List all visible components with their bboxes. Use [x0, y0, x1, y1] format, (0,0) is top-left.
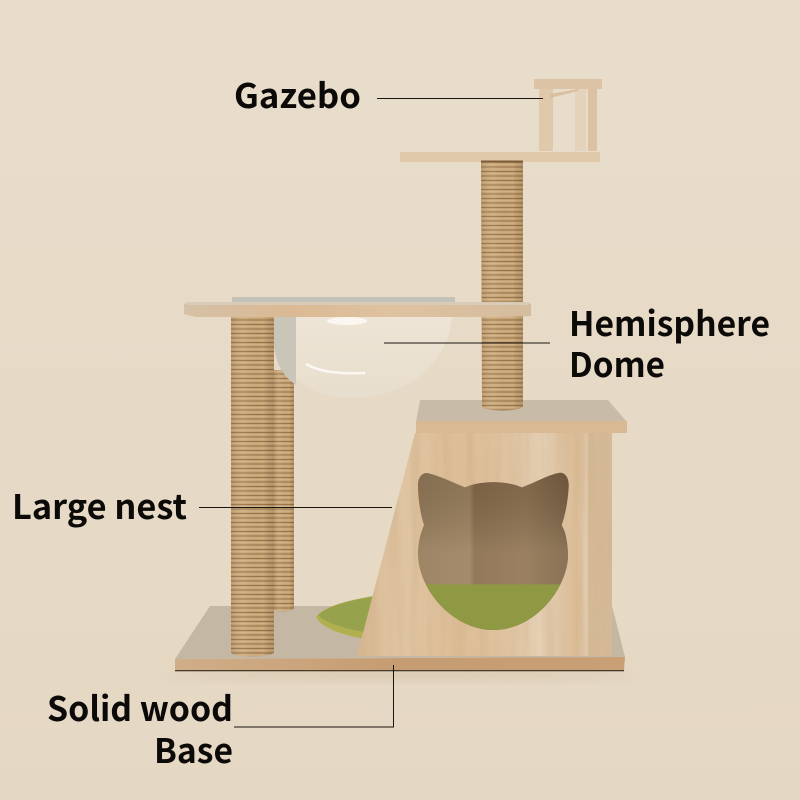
label: Hemisphere Dome: Dome: [569, 338, 665, 387]
hemisphere dome: [232, 297, 455, 398]
wood grain: [393, 433, 586, 656]
label: Solid wood Base: Base: [154, 724, 233, 773]
label: Solid wood Base: [47, 665, 394, 773]
nest roof: [416, 400, 627, 422]
platform crossing over upper post: [184, 302, 531, 317]
label: Hemisphere Dome: Hemisphere: [569, 297, 770, 346]
front post: [231, 317, 274, 656]
upper post: [481, 160, 523, 410]
top platform: [400, 152, 600, 162]
label: Large nest: Large nest: [12, 480, 187, 529]
label: Hemisphere Dome: [384, 297, 770, 387]
middle platform: [184, 302, 531, 317]
label: Solid wood Base: Solid wood: [47, 682, 233, 731]
cat-shaped opening: [415, 470, 572, 633]
gazebo: [534, 79, 602, 151]
label: Gazebo: Gazebo: [234, 69, 361, 118]
base board: [175, 606, 625, 671]
large nest: [355, 400, 627, 658]
cat tree illustration: [165, 79, 635, 680]
floor shadow: [165, 670, 635, 680]
back post: [274, 370, 294, 612]
green mat: [316, 596, 373, 638]
